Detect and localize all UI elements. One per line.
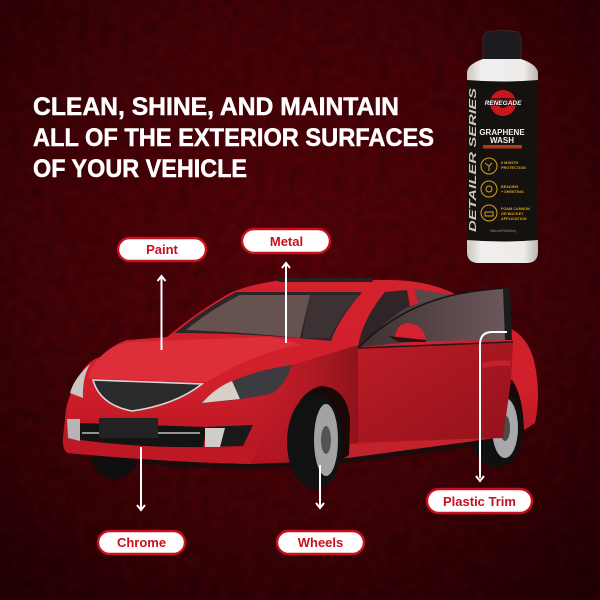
left headlight [70, 364, 90, 398]
label: paint [118, 238, 206, 261]
bottle label: + SHEETING [501, 190, 524, 194]
right intake [205, 425, 253, 447]
rear wheel arch [470, 380, 524, 445]
arrow: plastic trim [476, 332, 507, 481]
label: wheels [277, 531, 364, 554]
arrow: paint [158, 276, 166, 350]
bottle label: FOAM CANNON [501, 207, 530, 211]
open door [358, 288, 513, 442]
label: paint: Paint [146, 242, 179, 257]
label: wheels: Wheels [298, 535, 343, 550]
hood highlight [87, 337, 300, 382]
bottle label: WASH [490, 136, 514, 145]
side mirror [388, 323, 426, 342]
sunroof strip [278, 278, 373, 282]
bottle label: APPLICATION [501, 217, 527, 221]
fender shading [205, 345, 358, 462]
front wheel [287, 394, 343, 490]
lower bumper intake [80, 423, 207, 447]
rear wheel [469, 389, 523, 467]
label: metal: Metal [270, 234, 303, 249]
license plate [99, 418, 158, 438]
bottle label: 6 MONTH [501, 161, 518, 165]
side window rear [414, 289, 505, 340]
title: CLEAN, SHINE, AND MAINTAIN [33, 93, 399, 121]
front wheel arch [287, 386, 350, 462]
car [63, 278, 538, 490]
bottle label: DETAILER SERIES [467, 88, 479, 232]
bottle cap [483, 30, 521, 60]
far front wheel [89, 452, 139, 479]
bottle label: GRAPHENE [479, 128, 525, 137]
label: plastic trim [427, 489, 532, 513]
title [33, 93, 434, 183]
bottle label: BEADING [501, 185, 519, 189]
title: ALL OF THE EXTERIOR SURFACES [33, 124, 434, 152]
headlight [202, 365, 292, 403]
under shadow [90, 440, 470, 469]
door handle [482, 360, 511, 368]
car body [63, 280, 538, 464]
arrow: wheels [316, 465, 324, 508]
sill [347, 437, 503, 458]
bottle body [467, 59, 538, 263]
label: plastic trim: Plastic Trim [443, 494, 516, 509]
arrow: metal [282, 263, 290, 343]
bottle label: RENEGADE [485, 100, 522, 107]
label: chrome: Chrome [117, 535, 166, 550]
grille [93, 380, 202, 411]
product bottle [467, 30, 538, 263]
label: metal [242, 229, 330, 253]
label: chrome [98, 531, 185, 554]
windshield [175, 292, 362, 341]
bumper lip [63, 437, 262, 464]
bottle label: #NeverRideDirty [490, 229, 516, 233]
bottle label [467, 80, 538, 242]
side window front [358, 290, 416, 347]
bottle label: PROTECTION [501, 166, 526, 170]
arrow: chrome [137, 447, 145, 510]
bottle label: OR BUCKET [501, 212, 524, 216]
title: OF YOUR VEHICLE [33, 155, 247, 183]
fog lights [67, 419, 80, 441]
door glass [359, 288, 512, 347]
